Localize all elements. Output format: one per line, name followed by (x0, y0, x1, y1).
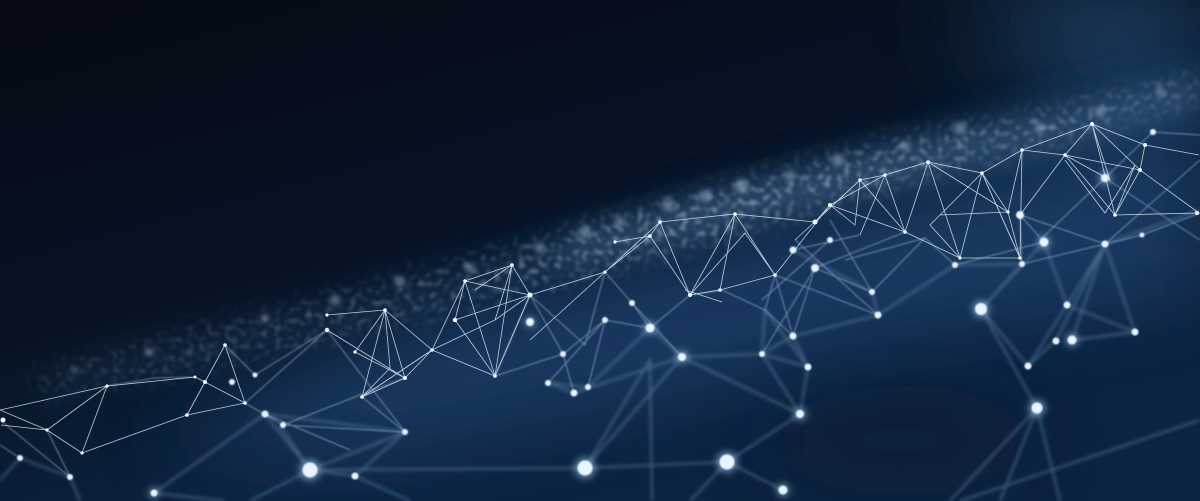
network nodes (0, 122, 1199, 498)
hazy particle band (37, 70, 1200, 403)
top right blue haze (960, 0, 1200, 110)
mid depth network lines (0, 132, 1200, 477)
blue glow above ridge (450, 70, 1200, 280)
small sharp nodes (0, 122, 1199, 455)
sharp foreground network lines (0, 124, 1199, 453)
glowing large nodes (17, 129, 1156, 498)
blurred background network lines (0, 210, 1200, 501)
dark lower right shade (770, 385, 1030, 495)
bokeh particles (72, 88, 1164, 373)
blue glow under ridge (150, 95, 1200, 460)
